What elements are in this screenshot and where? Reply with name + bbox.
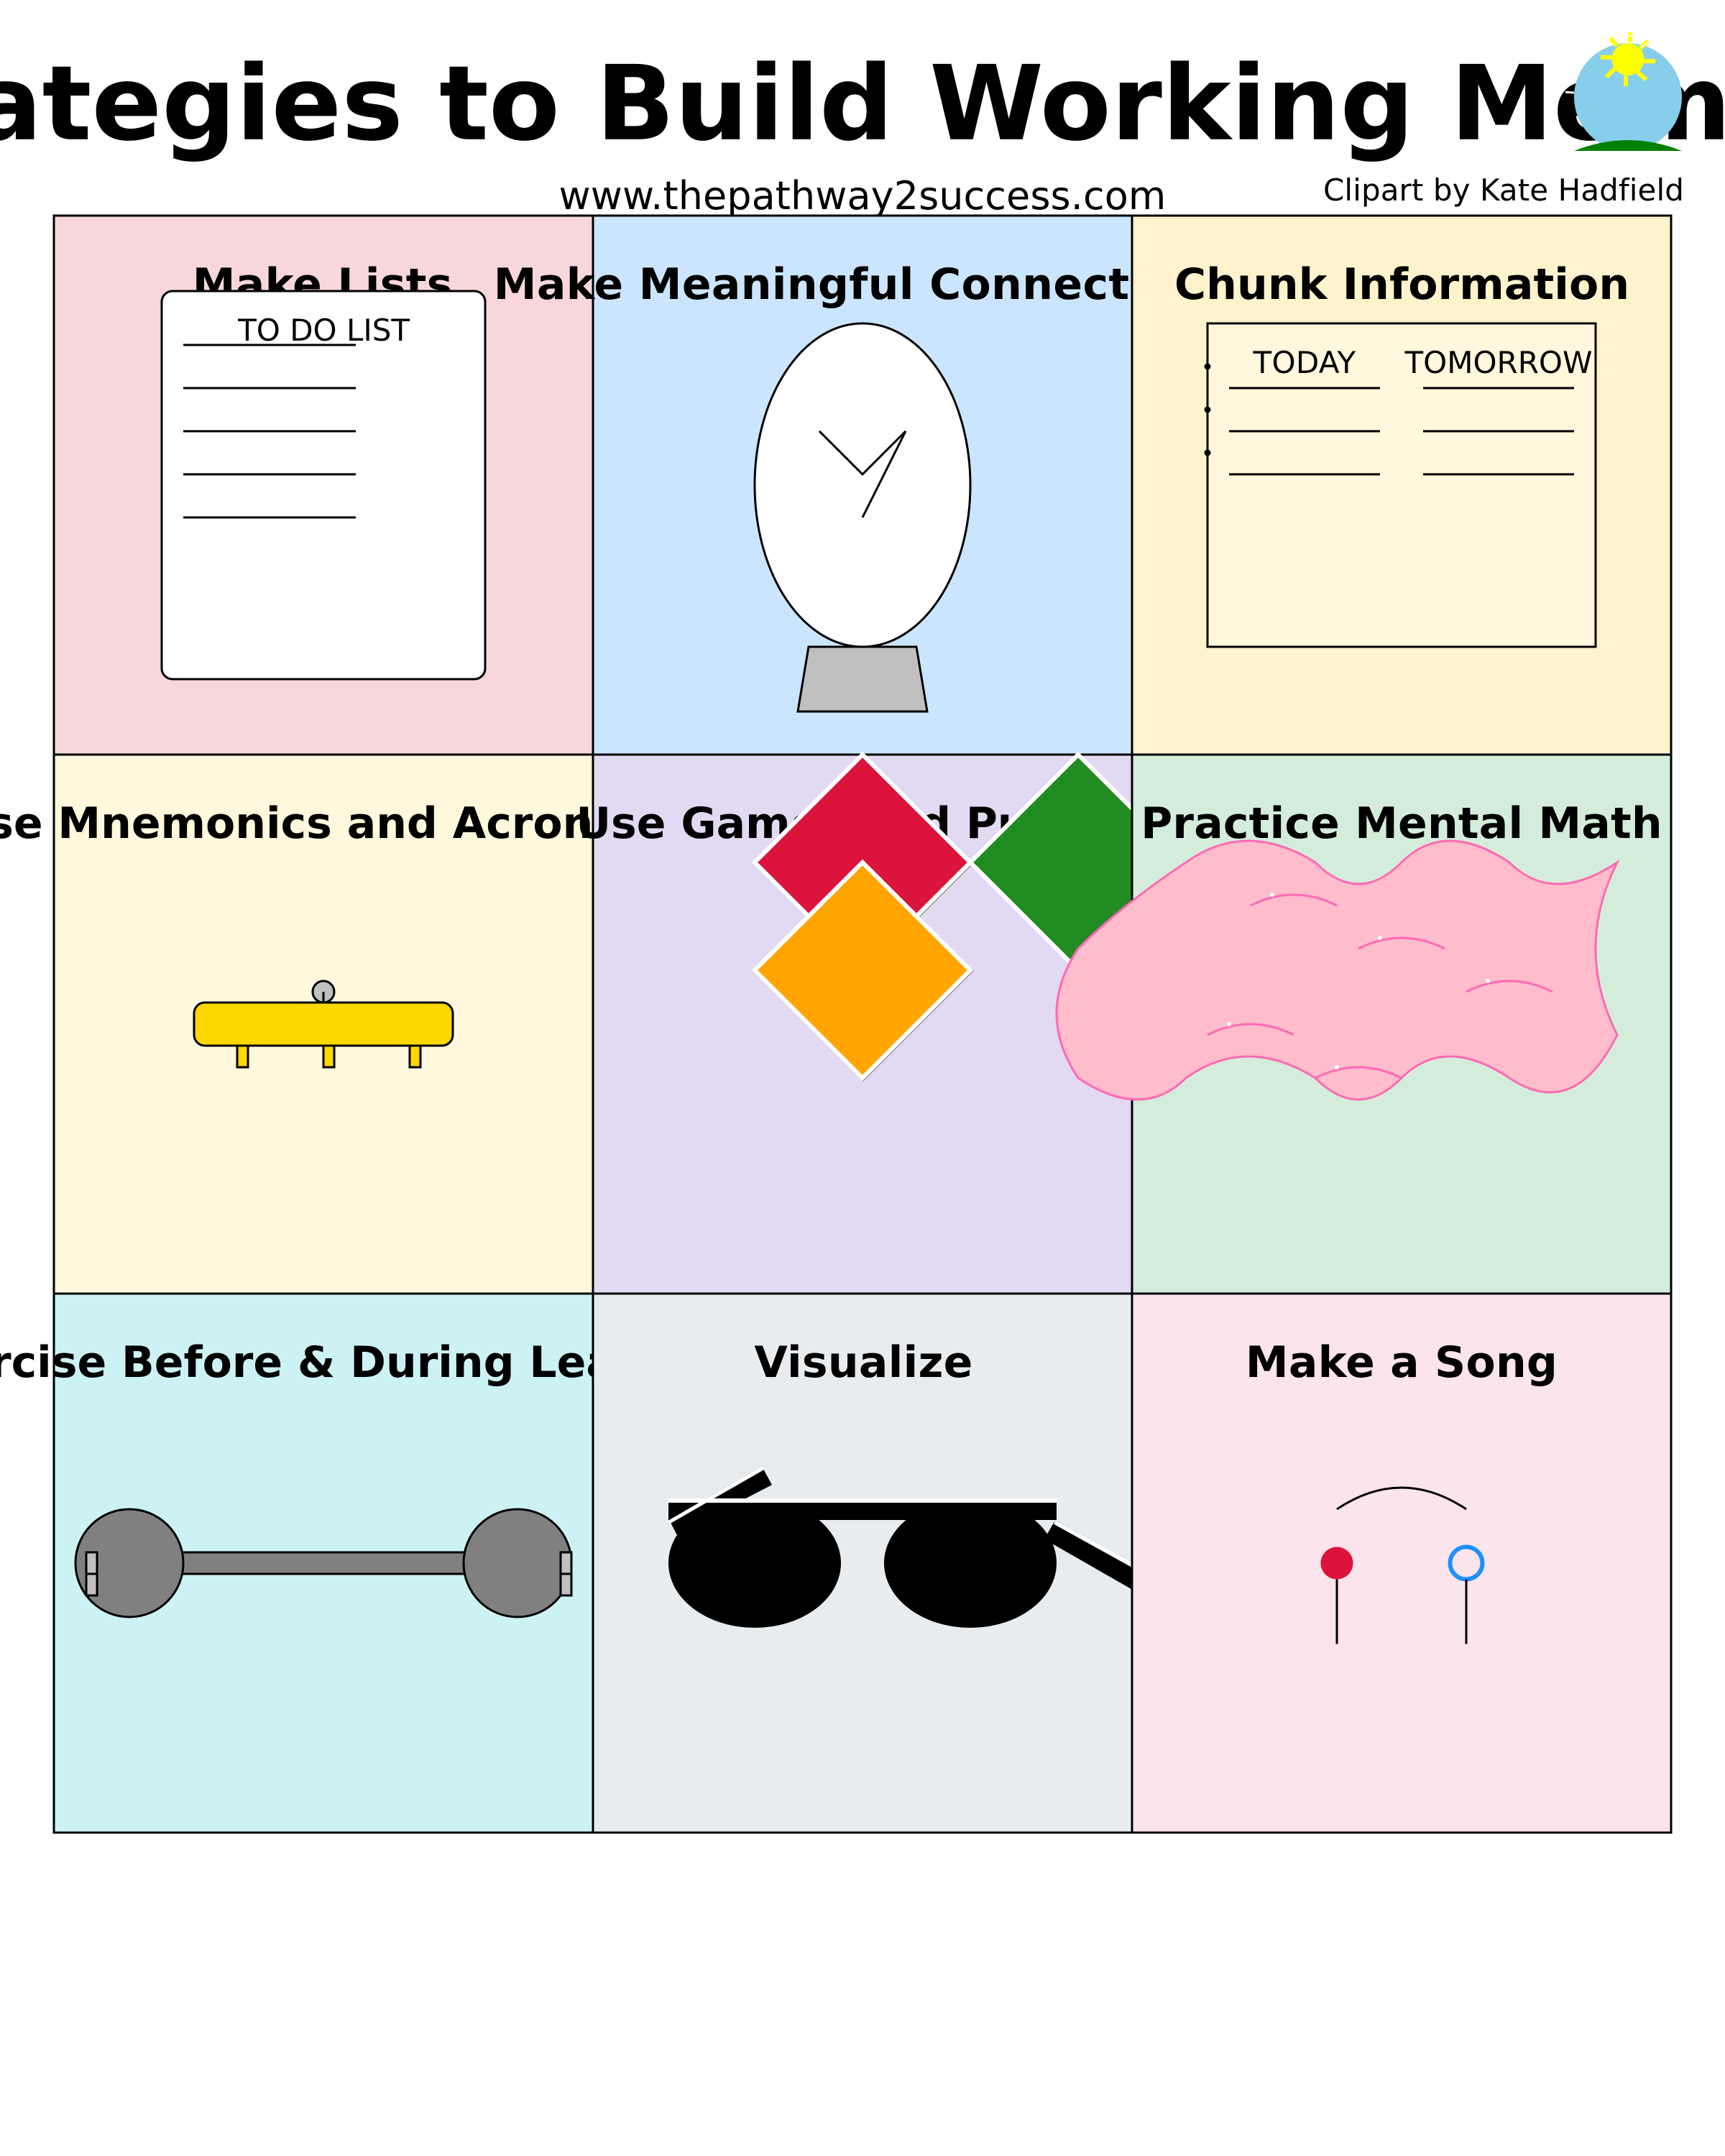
icon: green diamond bbox=[970, 755, 1186, 970]
heading: games and puzzles: Use Games and Puzzles bbox=[576, 798, 1148, 849]
heading: make lists: Make Lists bbox=[193, 259, 453, 310]
heading: meaningful connections: Make Meaningful Connections bbox=[494, 259, 1231, 310]
panel: games and puzzles bbox=[576, 755, 1186, 1294]
clipart credit: Clipart by Kate Hadfield bbox=[1323, 172, 1684, 208]
heading: make a song: Make a Song bbox=[1246, 1337, 1558, 1388]
icon: dumbbell bbox=[75, 1509, 571, 1617]
heading: visualize: Visualize bbox=[754, 1337, 973, 1388]
icon: brain bbox=[1057, 841, 1617, 1100]
icon: planner notebook: TODAY bbox=[1253, 345, 1356, 380]
icon: planner notebook bbox=[1205, 323, 1596, 647]
icon: light bulb bbox=[755, 323, 970, 711]
panel: mental math bbox=[1057, 755, 1671, 1294]
panel: make a song bbox=[1132, 1294, 1671, 1833]
panel: make lists bbox=[54, 216, 593, 755]
icon: yellow pencil bar bbox=[194, 981, 453, 1067]
icon: sun over hill bbox=[1565, 32, 1682, 151]
heading: chunk information: Chunk Information bbox=[1174, 259, 1629, 310]
icon: to do list clipboard bbox=[162, 291, 485, 679]
panel: meaningful connections bbox=[494, 216, 1231, 755]
website subtitle: www.thepathway2success.com bbox=[559, 173, 1166, 218]
icon: orange diamond bbox=[755, 862, 971, 1079]
icon: to do list clipboard: TO DO LIST bbox=[237, 313, 410, 348]
panel: exercise bbox=[0, 1294, 743, 1833]
icon: sunglasses bbox=[668, 1466, 1134, 1628]
panel: mnemonics and acronyms bbox=[0, 755, 692, 1294]
icon: planner notebook: TOMORROW bbox=[1404, 345, 1592, 380]
panel: visualize bbox=[593, 1294, 1134, 1833]
icon: music notes bbox=[1321, 1488, 1482, 1644]
heading: mental math: Practice Mental Math bbox=[1141, 798, 1662, 849]
icon: red diamond bbox=[755, 755, 971, 971]
panel: chunk information bbox=[1132, 216, 1671, 755]
